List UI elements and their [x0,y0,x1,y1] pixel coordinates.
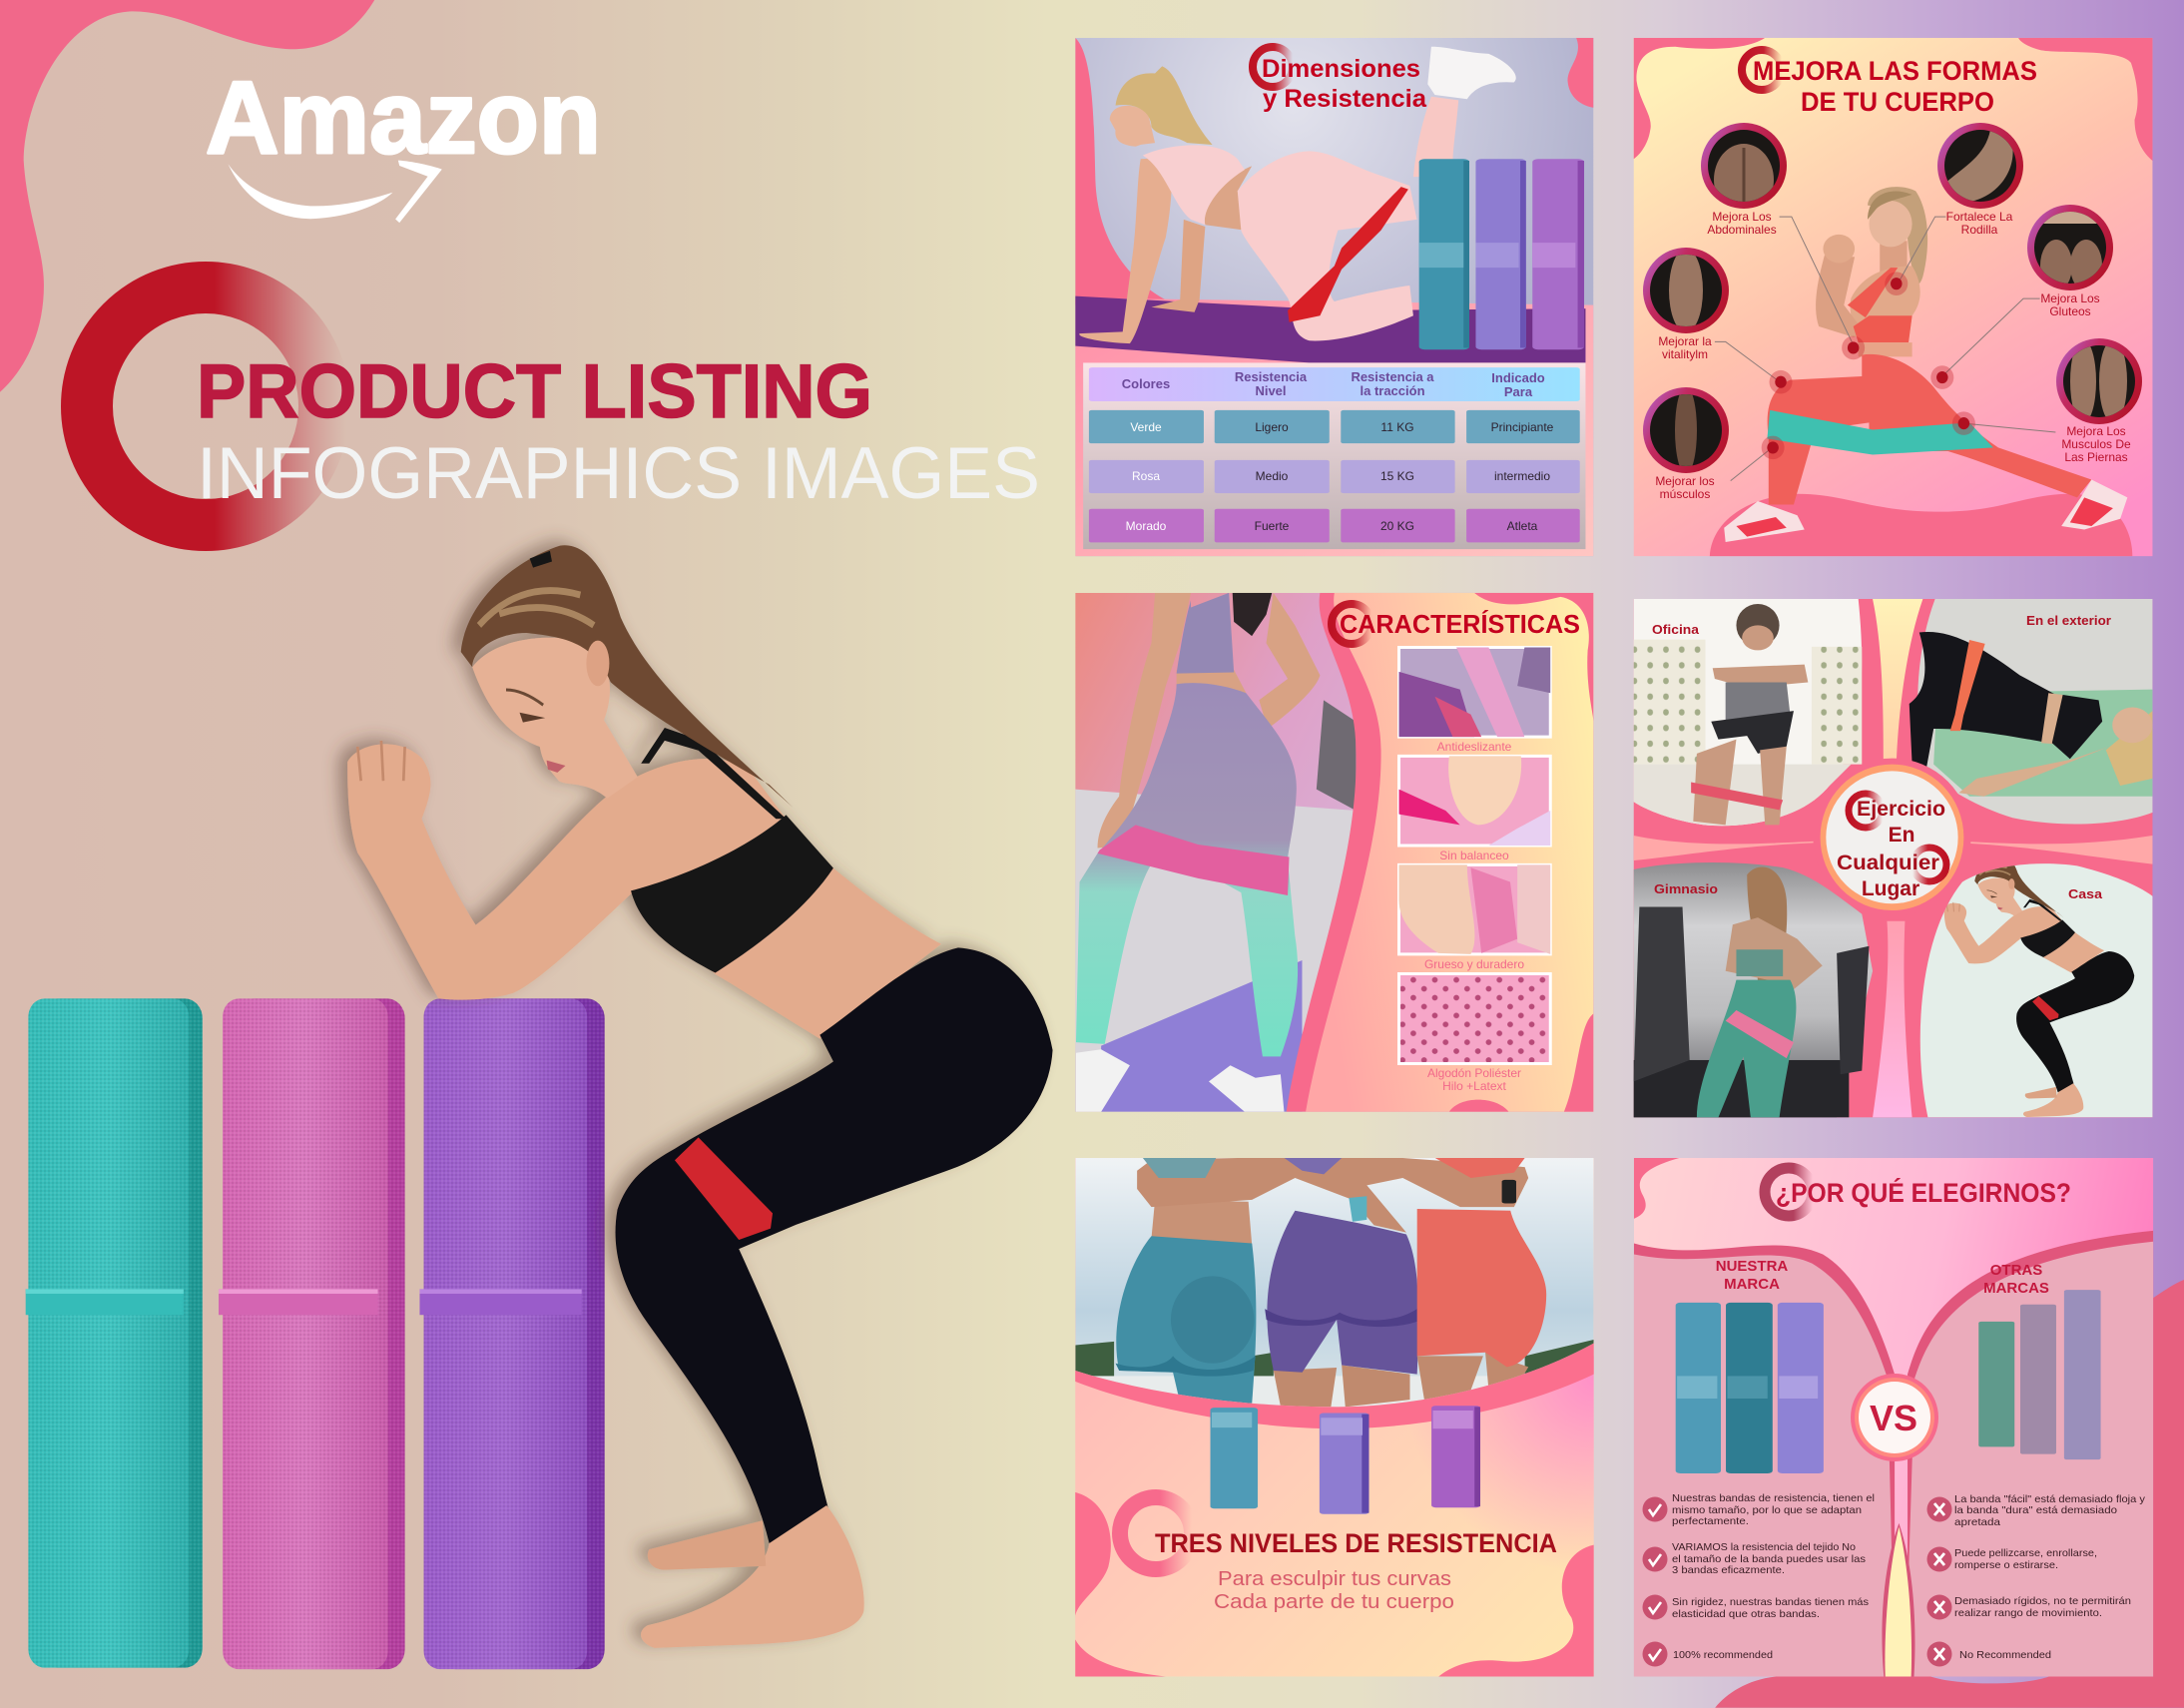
VS badge: VS [1870,1398,1917,1438]
title: CARACTERÍSTICAS [1340,609,1580,639]
table text: intermedio [1494,469,1550,483]
leader lines [1715,217,2055,481]
benefits list: 100% recommended [1673,1649,1773,1661]
center heading: Cualquier [1837,852,1939,874]
table text: 20 KG [1380,519,1414,533]
title: Dimensiones [1262,55,1420,83]
callout labels: Gluteos [2049,304,2091,318]
table text: Para [1504,384,1533,399]
table text: Rosa [1132,469,1160,483]
drawbacks list: romperse o estirarse. [1954,1559,2058,1571]
location labels [1652,613,2111,901]
column headings: MARCAS [1983,1280,2049,1297]
drawbacks list: Puede pellizcarse, enrollarse, [1954,1547,2097,1559]
check icons [1643,1497,1667,1667]
heading line 1: PRODUCT LISTING [197,349,872,434]
title [1262,55,1427,113]
callout labels: Musculos De [2061,437,2131,451]
panel 6 artwork [1634,1158,2153,1676]
icon: muscles circle [1643,386,1729,474]
panel 4 artwork [1634,599,2156,1119]
center heading: Lugar [1862,877,1919,900]
panel 1 artwork [1075,38,1593,556]
drawbacks list: la banda "dura" está demasiado [1954,1504,2117,1516]
subtitle: Para esculpir tus curvas [1218,1567,1451,1590]
figure: woman in lunge [1868,187,1927,285]
center circle [1813,759,1971,916]
callout labels: Mejorar la [1658,334,1712,348]
table text: 15 KG [1380,469,1414,483]
table text: Resistencia a [1351,369,1434,384]
drawbacks list: realizar rango de movimiento. [1954,1607,2102,1619]
quadrant: office [1634,599,1862,826]
our brand bands [1676,1303,1721,1473]
curved band [1075,1344,1594,1428]
panel: Tres niveles de resistencia [1075,1158,1594,1676]
column headings [1716,1258,2049,1297]
callout labels: Mejorar los [1655,474,1715,488]
benefits list [1672,1492,1875,1661]
mini bands [1419,159,1469,349]
location labels: Gimnasio [1654,881,1718,896]
table text: Ligero [1255,420,1289,434]
center heading [1837,798,1945,900]
benefits list: perfectamente. [1672,1515,1749,1527]
table text: Colores [1122,376,1170,391]
panel: Dimensiones y Resistencia [1075,38,1593,556]
ring emblem [1765,1168,1813,1216]
table text: Indicado [1491,370,1545,385]
title: ¿POR QUÉ ELEGIRNOS? [1776,1177,2071,1208]
title: DE TU CUERPO [1801,87,1994,117]
thumbnail: knit fabric [1399,974,1550,1064]
table text: Medio [1256,469,1289,483]
ring emblem [87,287,324,525]
icon: glutes circle [2027,205,2113,291]
location labels: En el exterior [2026,613,2111,628]
logo: Amazon [206,60,601,223]
target dots [1762,272,1975,459]
location labels: Casa [2068,886,2103,901]
heading line 2: INFOGRAPHICS IMAGES [197,433,1040,514]
cross icons [1926,1497,1952,1667]
center heading: Ejercicio [1857,798,1945,821]
title [1753,56,2037,117]
callout labels [1655,210,2131,501]
dividing curves [1634,1244,1895,1676]
panel 2 artwork [1634,38,2152,556]
figure: woman from behind [1098,593,1191,849]
drawbacks list: Demasiado rígidos, no te permitirán [1954,1595,2131,1607]
captions: Sin balanceo [1439,849,1509,862]
curved panel [1287,593,1593,1112]
thumbnail: thick and durable [1399,864,1550,954]
benefits list: Sin rigidez, nuestras bandas tienen más [1672,1596,1869,1608]
table text: Verde [1130,420,1162,434]
logo: Amazon: Amazon [206,60,601,175]
subtitle [1214,1567,1454,1613]
callout labels: Mejora Los [2040,291,2100,305]
benefits list: elasticidad que otras bandas. [1672,1608,1820,1620]
column headings: MARCA [1724,1276,1780,1293]
callout labels: Rodilla [1961,223,1998,237]
drawbacks list: La banda "fácil" está demasiado floja y [1954,1493,2146,1505]
callout labels: Las Piernas [2064,450,2128,464]
icon: vitality circle [1643,248,1729,333]
callout labels: vitalitylm [1662,347,1708,361]
panel 5 artwork [1075,1158,1594,1676]
bands [1211,1408,1258,1508]
ring emblem [1253,47,1293,87]
band: pink [219,998,405,1669]
callout labels: Mejora Los [2066,424,2126,438]
benefits list: VARIAMOS la resistencia del tejido No [1672,1541,1856,1553]
quadrant: gym [1634,862,1873,1117]
photo: three women [1075,1158,1594,1413]
ring emblem [1742,50,1782,90]
icon: amazon smile arrow [228,161,442,223]
column headings: OTRAS [1990,1262,2042,1279]
panel 3 artwork [1075,593,1593,1112]
icon: knee circle [1937,123,2023,209]
drawbacks list [1954,1493,2146,1661]
drawbacks list: apretada [1954,1516,2000,1528]
table text: Morado [1126,519,1167,533]
callout labels: Mejora Los [1712,210,1772,224]
table text: 11 KG [1380,420,1414,434]
benefits list: el tamaño de la banda puedes usar las [1672,1553,1866,1565]
table text: Resistencia [1235,369,1308,384]
quadrant: home [1912,856,2156,1119]
table text [1122,369,1554,533]
icon: abdominals circle [1701,123,1787,216]
ring emblem [1120,1497,1192,1569]
quadrant: outdoors [1910,599,2152,825]
table text: la tracción [1360,383,1425,398]
title: y Resistencia [1263,85,1427,113]
table background [1083,362,1585,549]
captions: Hilo +Latext [1442,1079,1507,1093]
pink blob: top-left corner [0,0,374,392]
VS badge [1851,1374,1938,1461]
callout labels: Abdominales [1707,223,1777,237]
table text: Principiante [1491,420,1554,434]
callout labels: músculos [1660,487,1710,501]
title: TRES NIVELES DE RESISTENCIA [1155,1528,1557,1558]
ring emblem [1332,604,1371,644]
table text: Fuerte [1255,519,1290,533]
drawbacks list: No Recommended [1959,1649,2051,1661]
panel: Por qué elegirnos [1634,1158,2153,1676]
photo: woman squatting with red band [347,545,1053,1648]
column headings: NUESTRA [1716,1258,1788,1275]
pink blob: bottom-right corner [1715,1280,2184,1708]
center heading: En [1889,824,1914,847]
benefits list: 3 bandas eficazmente. [1672,1564,1785,1576]
band: purple [419,998,605,1669]
band: teal [26,998,203,1668]
table text: Atleta [1507,519,1538,533]
captions: Antideslizante [1437,740,1512,754]
icon: leg muscles circle [2056,338,2142,424]
thumbnail: anti-slip [1399,648,1550,737]
title: MEJORA LAS FORMAS [1753,56,2037,86]
subtitle: Cada parte de tu cuerpo [1214,1590,1454,1613]
callout labels: Fortalece La [1946,210,2013,224]
other brand bands [1978,1322,2014,1446]
product: three resistance bands [26,998,605,1669]
captions: Grueso y duradero [1424,957,1524,971]
panel: Mejora las formas de tu cuerpo [1634,38,2152,556]
heading: product listing infographics images [87,287,1040,525]
thumbnail: no balance [1399,756,1550,846]
table text: Nivel [1255,383,1287,398]
location labels: Oficina [1652,622,1700,637]
captions [1424,740,1524,1093]
panel: Ejercicio en cualquier lugar [1634,599,2156,1119]
corner blobs [1075,1492,1594,1676]
benefits list: Nuestras bandas de resistencia, tienen el [1672,1492,1875,1504]
captions: Algodón Poliéster [1427,1066,1521,1080]
ring emblems [1849,794,1946,881]
panel: Características [1075,593,1593,1112]
benefits list: mismo tamaño, por lo que se adaptan [1672,1504,1862,1516]
